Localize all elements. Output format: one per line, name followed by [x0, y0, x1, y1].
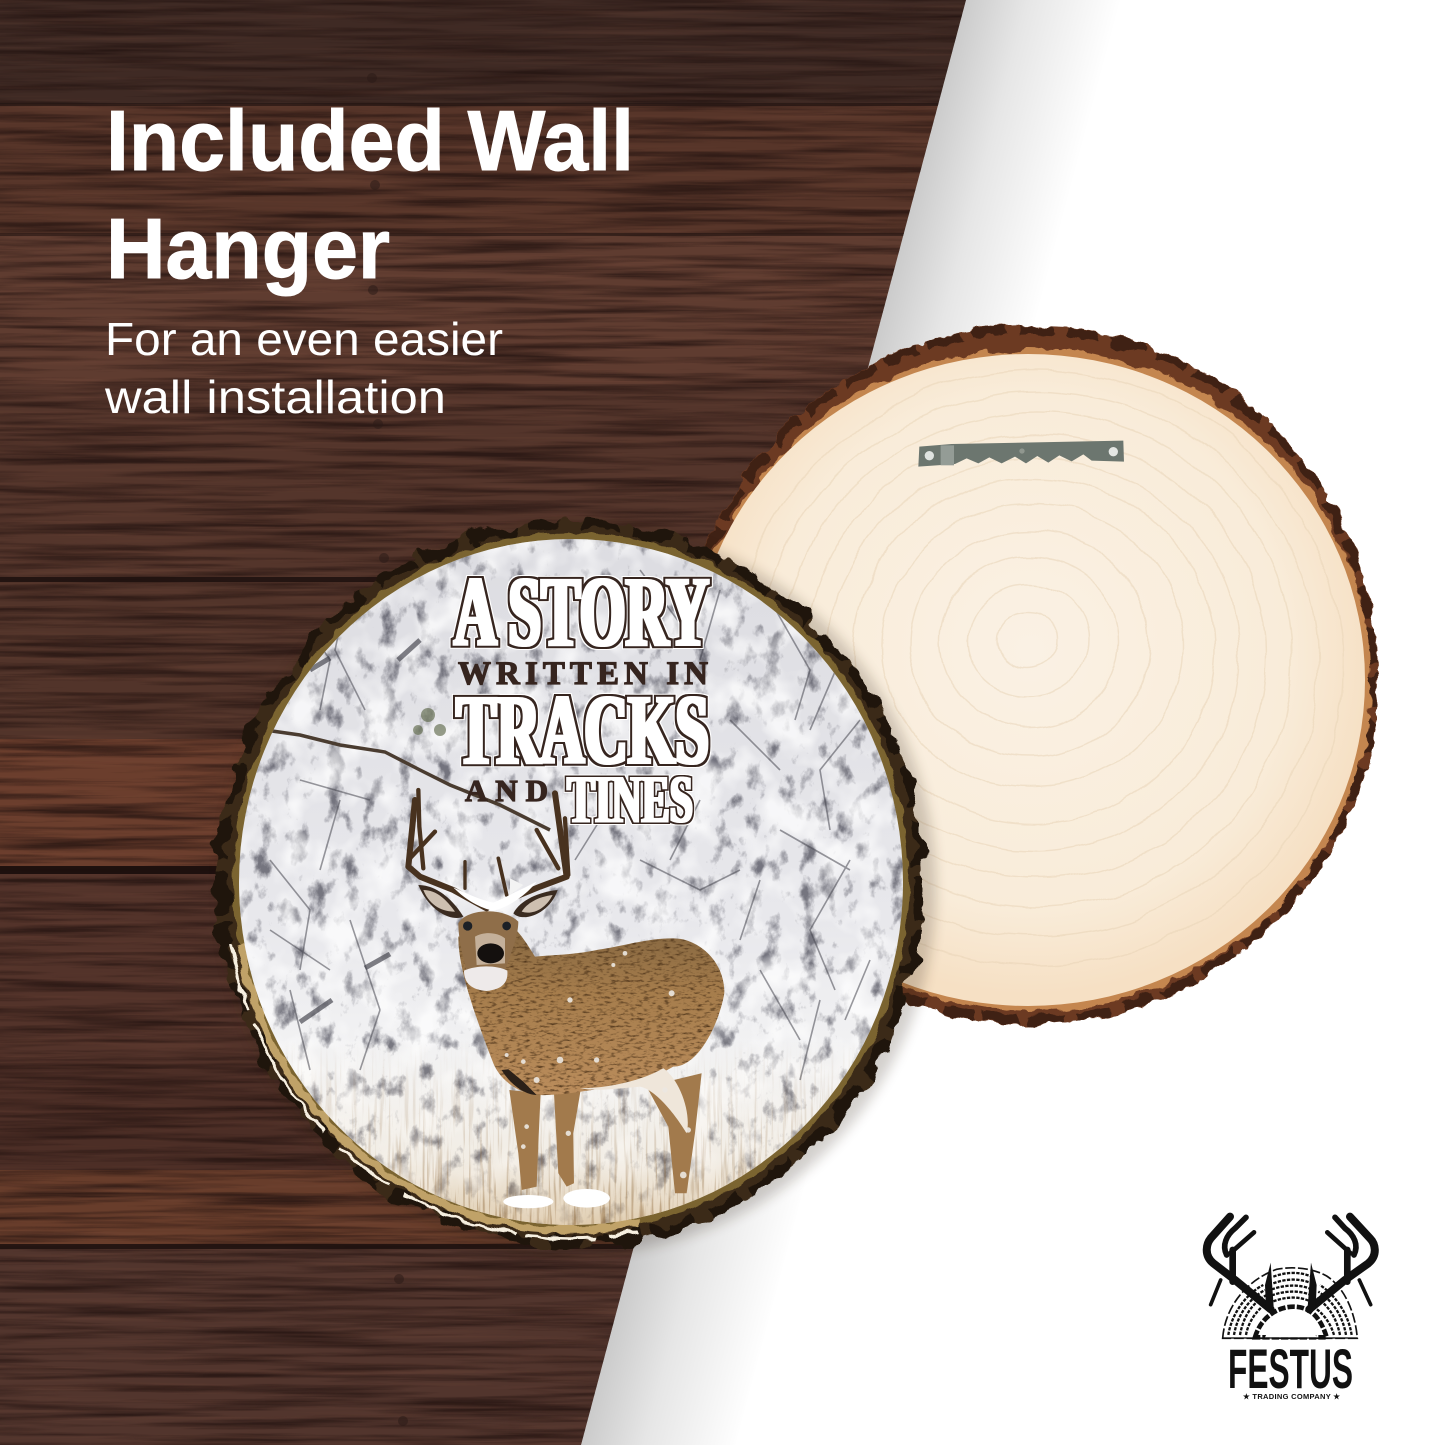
- deer: falling snowflakes: [505, 951, 691, 1178]
- print title: A STORY WRITTEN IN TRACKS AND TINES: WRITTEN IN: [458, 656, 708, 692]
- logo: Festus Trading Company: [1207, 1217, 1375, 1401]
- snowy branches: [270, 570, 870, 1080]
- logo: central cut arch: [1255, 1307, 1327, 1337]
- subheading text: For an even easier: [105, 313, 503, 365]
- front slice: bark edge: [217, 520, 925, 1246]
- deer photo in snowy forest: [230, 530, 920, 1240]
- back slice: growth rings: [733, 370, 1343, 966]
- deer: legs: [509, 1073, 702, 1193]
- pine foliage: [413, 708, 446, 736]
- front slice: shadow on back slice: [220, 522, 936, 1254]
- logo: right antler: [1309, 1217, 1375, 1309]
- dark snow-covered trunks: [300, 640, 420, 1022]
- back slice: bark edge: [682, 325, 1378, 1025]
- front of wood slice with deer print: [217, 520, 936, 1254]
- deer: foreground snow: [503, 1195, 553, 1208]
- deer: collar dark patch: [502, 1069, 537, 1095]
- back slice: pale wood face: [691, 354, 1365, 1006]
- deer: eyes and nose: [463, 921, 472, 931]
- subheading text: [104, 313, 503, 423]
- wall hanger sawtooth bracket: [918, 441, 1124, 467]
- print title: A STORY WRITTEN IN TRACKS AND TINES: [454, 556, 709, 837]
- deer: belly highlight: [580, 1068, 688, 1133]
- grass at the bottom: [322, 1101, 822, 1225]
- logo: antlers and log: [1207, 1217, 1375, 1339]
- deer: white throat patch: [464, 966, 507, 991]
- print title: A STORY WRITTEN IN TRACKS AND TINES: A STORY: [454, 556, 709, 667]
- print title: A STORY WRITTEN IN TRACKS AND TINES: TINES: [567, 761, 693, 837]
- deer: ears: [418, 885, 463, 918]
- snow background: [230, 530, 920, 1240]
- heading: Included Wall: [106, 94, 634, 189]
- logo: log slice rings: [1223, 1268, 1357, 1338]
- panel: dark wood planks: [0, 0, 1000, 1445]
- deer: snow on head: [453, 882, 537, 911]
- branch across photo: [265, 730, 550, 830]
- back of wood slice with hanger: [682, 325, 1378, 1025]
- diagonal shadow next to wood panel: [580, 0, 1120, 1445]
- logo: wordmark FESTUS: FESTUS: [1228, 1337, 1353, 1400]
- heading: Hanger: [106, 202, 390, 297]
- deer: body: [458, 927, 724, 1095]
- white-tailed deer: [408, 790, 724, 1208]
- deer: head: [458, 911, 518, 972]
- print title: A STORY WRITTEN IN TRACKS AND TINES: AND: [465, 773, 548, 808]
- front slice: glossy highlights: [231, 942, 640, 1238]
- heading: [106, 94, 634, 297]
- deer: antlers: [408, 790, 568, 908]
- front slice: tan inner ring: [233, 533, 909, 1231]
- print title: A STORY WRITTEN IN TRACKS AND TINES: TRACKS: [456, 674, 709, 785]
- logo: left antler: [1207, 1217, 1271, 1309]
- logo: tagline: ★ TRADING COMPANY ★: [1243, 1392, 1341, 1401]
- subheading text: wall installation: [104, 371, 446, 423]
